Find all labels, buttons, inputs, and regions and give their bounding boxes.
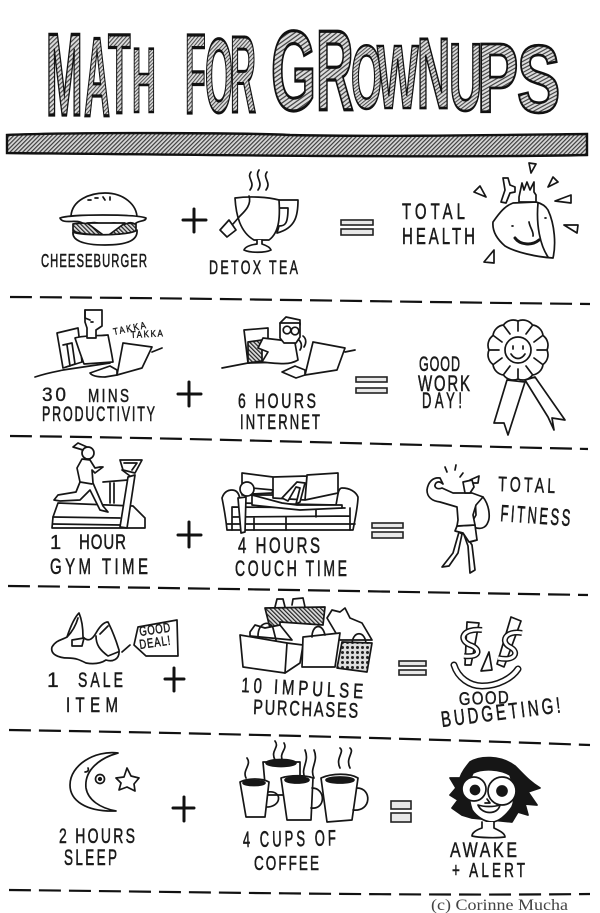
icon: cheeseburger: [60, 193, 146, 245]
title: W: [377, 28, 419, 128]
label: takka takka: TAKKA: [112, 320, 147, 337]
plus: [173, 797, 194, 821]
title: H: [132, 28, 156, 132]
icon: heart: [474, 163, 578, 263]
icon: treadmill runner: [52, 443, 145, 528]
label: awake + alert: AWAKE: [450, 838, 517, 861]
divider 2: [10, 436, 588, 449]
label: 10 impulse purchases: PURCHASES: [253, 695, 359, 722]
label: 1 hour gym time: 1: [50, 532, 61, 554]
label: detox tea: DETOX TEA: [209, 257, 298, 279]
title: G: [271, 9, 316, 135]
label: 30 mins productivity: MINS: [88, 386, 129, 407]
icon: bra: [52, 613, 119, 664]
icon: man typing: [35, 310, 162, 377]
label: 6 hours internet: INTERNET: [240, 410, 320, 434]
label: 2 hours sleep: [59, 824, 135, 870]
label: awake + alert: + ALERT: [452, 858, 525, 882]
divider 1: [10, 297, 590, 304]
label: awake + alert: [450, 838, 525, 882]
row 3: 1 hour gym time + 4 hours couch time = total fitness: [50, 443, 571, 581]
divider 4: [9, 730, 590, 745]
icon: moon and star: [70, 753, 139, 811]
icon: speech bubble good deal: [122, 620, 178, 656]
icon: speech bubble good deal: GOOD: [139, 621, 171, 639]
icon: speech bubble good deal: DEAL!: [139, 634, 171, 652]
title: R: [316, 7, 354, 134]
label: 30 mins productivity: 30: [42, 385, 66, 406]
label: takka takka: TAKKA: [131, 328, 163, 340]
label: takka takka: [112, 320, 163, 340]
title: S: [517, 27, 560, 133]
label: 10 impulse purchases: [241, 674, 364, 722]
label: total fitness: TOTAL: [498, 472, 556, 498]
label: total health: [402, 200, 475, 250]
icon: couch: [222, 473, 358, 533]
title: M: [46, 9, 83, 140]
label: 1 hour gym time: [50, 529, 148, 580]
title: F: [185, 10, 206, 137]
title: O: [351, 27, 382, 127]
label: 1 hour gym time: HOUR: [79, 529, 126, 554]
label: total fitness: [498, 472, 571, 532]
label: 4 cups of coffee: COFFEE: [254, 851, 319, 875]
label: good work day: [418, 352, 470, 413]
label: total fitness: FITNESS: [500, 501, 571, 532]
equals: [341, 220, 373, 235]
title: U: [449, 23, 482, 130]
title: T: [108, 11, 131, 137]
label: 4 cups of coffee: 4 CUPS OF: [243, 826, 336, 852]
label: 4 hours couch time: 4 HOURS: [238, 534, 320, 559]
label: 4 cups of coffee: [243, 826, 336, 875]
label: good budgeting: GOOD: [458, 687, 509, 709]
plus: [178, 382, 201, 406]
row 5: 2 hours sleep + 4 cups of coffee = awake + alert: [59, 741, 540, 882]
title: O: [205, 17, 233, 135]
equals: [356, 377, 387, 393]
header bar: [7, 133, 587, 156]
label: 4 hours couch time: [235, 534, 347, 581]
label: 30 mins productivity: PRODUCTIVITY: [42, 402, 155, 426]
label: 1 sale item: [47, 668, 123, 717]
title: [46, 7, 560, 140]
title: R: [230, 15, 256, 136]
label: 1 hour gym time: GYM TIME: [50, 555, 148, 580]
row 1: cheeseburger + detox tea = total health: [41, 163, 578, 279]
label: 10 impulse purchases: 10 IMPULSE: [241, 674, 364, 703]
label: cheeseburger: CHEESEBURGER: [41, 251, 147, 272]
label: 1 sale item: SALE: [78, 668, 123, 692]
icon: muscle man: [427, 465, 489, 573]
plus: [178, 522, 201, 547]
label: total health: TOTAL: [402, 200, 465, 225]
title: A: [84, 15, 110, 140]
label: good work day: WORK: [418, 372, 470, 397]
icon: rosette: [488, 320, 565, 435]
label: good work day: DAY!: [422, 388, 462, 413]
icon: coffee cups: [240, 741, 368, 822]
title: P: [477, 25, 518, 134]
icon: detox tea: [220, 170, 298, 252]
icon: money face: [454, 617, 522, 686]
label: 1 sale item: 1: [47, 669, 59, 692]
icon: wide-eyed face: [450, 758, 540, 838]
divider 3: [8, 586, 588, 595]
equals: [372, 523, 403, 538]
icon: shopping bags: [240, 598, 372, 673]
plus: [183, 209, 206, 232]
row 2: 30 mins productivity + 6 hours internet = good work day: [35, 310, 565, 435]
label: 30 mins productivity: [42, 385, 155, 426]
label: good work day: GOOD: [419, 352, 460, 376]
row 4: 1 sale item + 10 impulse purchases = good budgeting: [47, 598, 562, 733]
plus: [165, 668, 184, 691]
label: total health: HEALTH: [402, 224, 475, 250]
equals: [399, 661, 426, 675]
label: 6 hours internet: [238, 389, 320, 434]
label: 2 hours sleep: 2 HOURS: [59, 824, 135, 848]
label: 6 hours internet: 6 HOURS: [238, 389, 316, 413]
icon: man browsing: [222, 317, 355, 378]
label: good budgeting: BUDGETING!: [440, 694, 562, 733]
label: 2 hours sleep: SLEEP: [64, 844, 117, 870]
equals: [391, 801, 411, 822]
label: 1 sale item: ITEM: [66, 694, 118, 717]
label: 4 hours couch time: COUCH TIME: [235, 556, 347, 581]
title: N: [417, 19, 450, 130]
divider 5: [9, 890, 590, 895]
